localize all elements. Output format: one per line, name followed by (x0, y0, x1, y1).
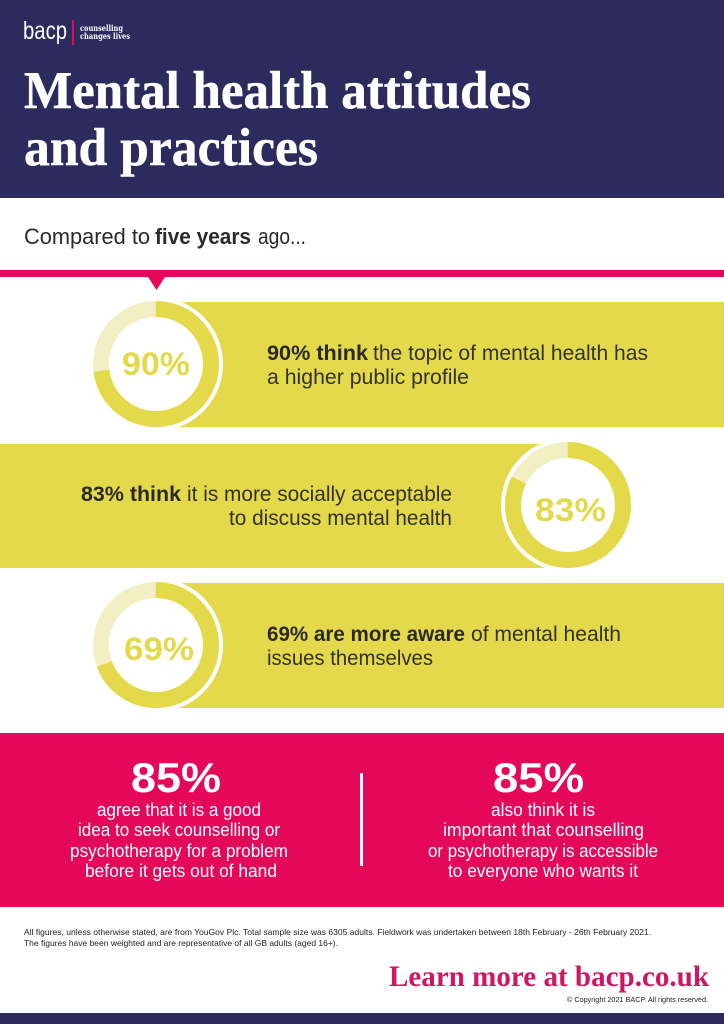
text: 83 percent statement: 83% think (81, 483, 181, 506)
logo (23, 17, 130, 45)
stat: seek counselling (70, 754, 288, 881)
stat: accessible counselling (428, 754, 658, 881)
text: 90 percent statement: the topic of mental health has (373, 342, 648, 365)
header panel (0, 0, 724, 198)
footer band (0, 1013, 724, 1024)
stat: seek counselling: before it gets out of hand (85, 861, 277, 881)
title: Mental health attitudes (24, 62, 531, 120)
panel: 85 percent statistics (0, 733, 724, 907)
text: 69 percent statement: issues themselves (267, 647, 433, 670)
donut chart: 69%: 69% (124, 631, 194, 667)
panel: 69 percent (89, 578, 724, 712)
panel: 90 percent (89, 297, 724, 431)
stat: accessible counselling: 85% (493, 754, 584, 801)
text: 69 percent statement: 69% are more aware (267, 623, 465, 646)
stat: seek counselling: idea to seek counselling or (78, 820, 280, 840)
panel: 83 percent (0, 438, 635, 572)
stat: accessible counselling: also think it is (491, 800, 595, 820)
text: 69 percent statement (267, 623, 621, 670)
stat: accessible counselling: or psychotherapy is accessible (428, 841, 658, 861)
subheading (24, 224, 306, 249)
text: 90 percent statement (267, 342, 648, 389)
stat: seek counselling: agree that it is a good (97, 800, 261, 820)
text: 83 percent statement (81, 483, 452, 530)
subheading: Compared to (24, 224, 150, 249)
logo: counselling (80, 23, 123, 33)
footnote: All figures, unless otherwise stated, are from YouGov Plc. Total sample size was 6305 adults. Fieldwork was undertaken between 18th February - 26th February 2021. (24, 927, 651, 937)
footnote: The figures have been weighted and are representative of all GB adults (aged 16+). (24, 938, 338, 948)
subheading: five years (155, 224, 251, 249)
subheading: ago... (258, 224, 306, 249)
pink divider with pointer (0, 270, 724, 290)
footnote (24, 927, 651, 948)
stat: accessible counselling: important that counselling (443, 820, 644, 840)
call to action: Learn more at bacp.co.uk (389, 960, 709, 993)
donut chart: 69% (101, 590, 211, 700)
donut chart: 90%: 90% (122, 346, 190, 382)
logo: changes lives (80, 31, 130, 41)
title (24, 62, 531, 177)
stat: seek counselling: psychotherapy for a problem (70, 841, 288, 861)
logo: bacp (23, 17, 67, 45)
text: 69 percent statement: of mental health (471, 623, 621, 646)
donut chart: 83% (513, 450, 623, 560)
stat: accessible counselling: to everyone who wants it (448, 861, 638, 881)
copyright: © Copyright 2021 BACP. All rights reserved. (567, 996, 708, 1004)
text: 83 percent statement: to discuss mental health (229, 507, 452, 530)
text: 90 percent statement: a higher public profile (267, 366, 469, 389)
text: 83 percent statement: it is more socially acceptable (187, 483, 452, 506)
stat: seek counselling: 85% (131, 754, 221, 801)
title: and practices (24, 119, 318, 177)
donut chart: 83%: 83% (535, 492, 606, 528)
donut chart: 90% (101, 309, 211, 419)
text: 90 percent statement: 90% think (267, 342, 368, 365)
